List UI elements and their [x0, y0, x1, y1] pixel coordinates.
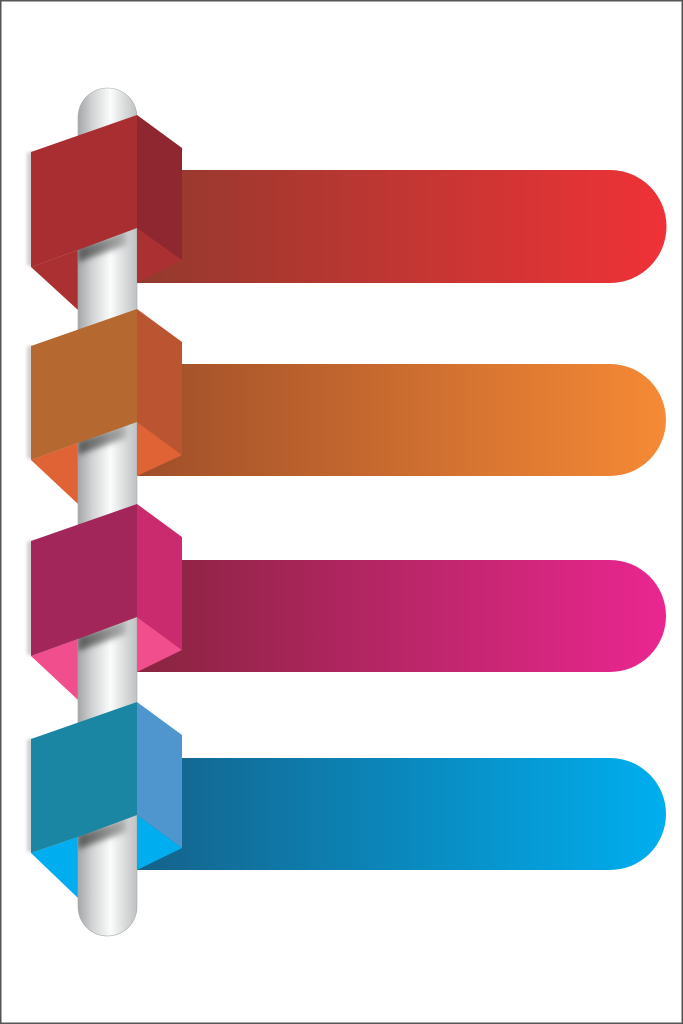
block 3 lower right face — [137, 617, 182, 672]
block 3 shadow on pole — [78, 619, 126, 651]
block 3 right face — [137, 504, 182, 650]
block 1 lower right face — [137, 228, 182, 283]
bottom flaps behind the pole — [31, 250, 78, 898]
block 4 left shadow — [27, 738, 33, 853]
block 1 left shadow — [27, 151, 33, 267]
block 4 front face — [31, 702, 137, 853]
block 2 front face — [31, 309, 137, 460]
block 1 right face — [137, 115, 182, 260]
bar 4: blue — [137, 758, 666, 870]
block 4 right face — [137, 702, 182, 848]
block 1: red — [27, 115, 182, 283]
block 1 front face — [31, 115, 137, 267]
block 2 left shadow — [27, 345, 33, 460]
block 3 front face — [31, 504, 137, 656]
block 4 shadow on pole — [78, 817, 126, 849]
block 2 lower right face — [137, 422, 182, 476]
bar 3: magenta — [137, 560, 666, 672]
block 4: blue — [27, 702, 182, 870]
silver pole — [78, 88, 137, 936]
block 3: magenta — [27, 504, 182, 672]
block 3 left shadow — [27, 540, 33, 656]
block 2: orange — [27, 309, 182, 476]
block 2 right face — [137, 309, 182, 455]
block 2 shadow on pole — [78, 423, 126, 455]
block 4 lower right face — [137, 815, 182, 870]
bar 2: orange — [137, 364, 666, 476]
block 1 shadow on pole — [78, 230, 126, 262]
bar 1: red — [137, 170, 666, 283]
